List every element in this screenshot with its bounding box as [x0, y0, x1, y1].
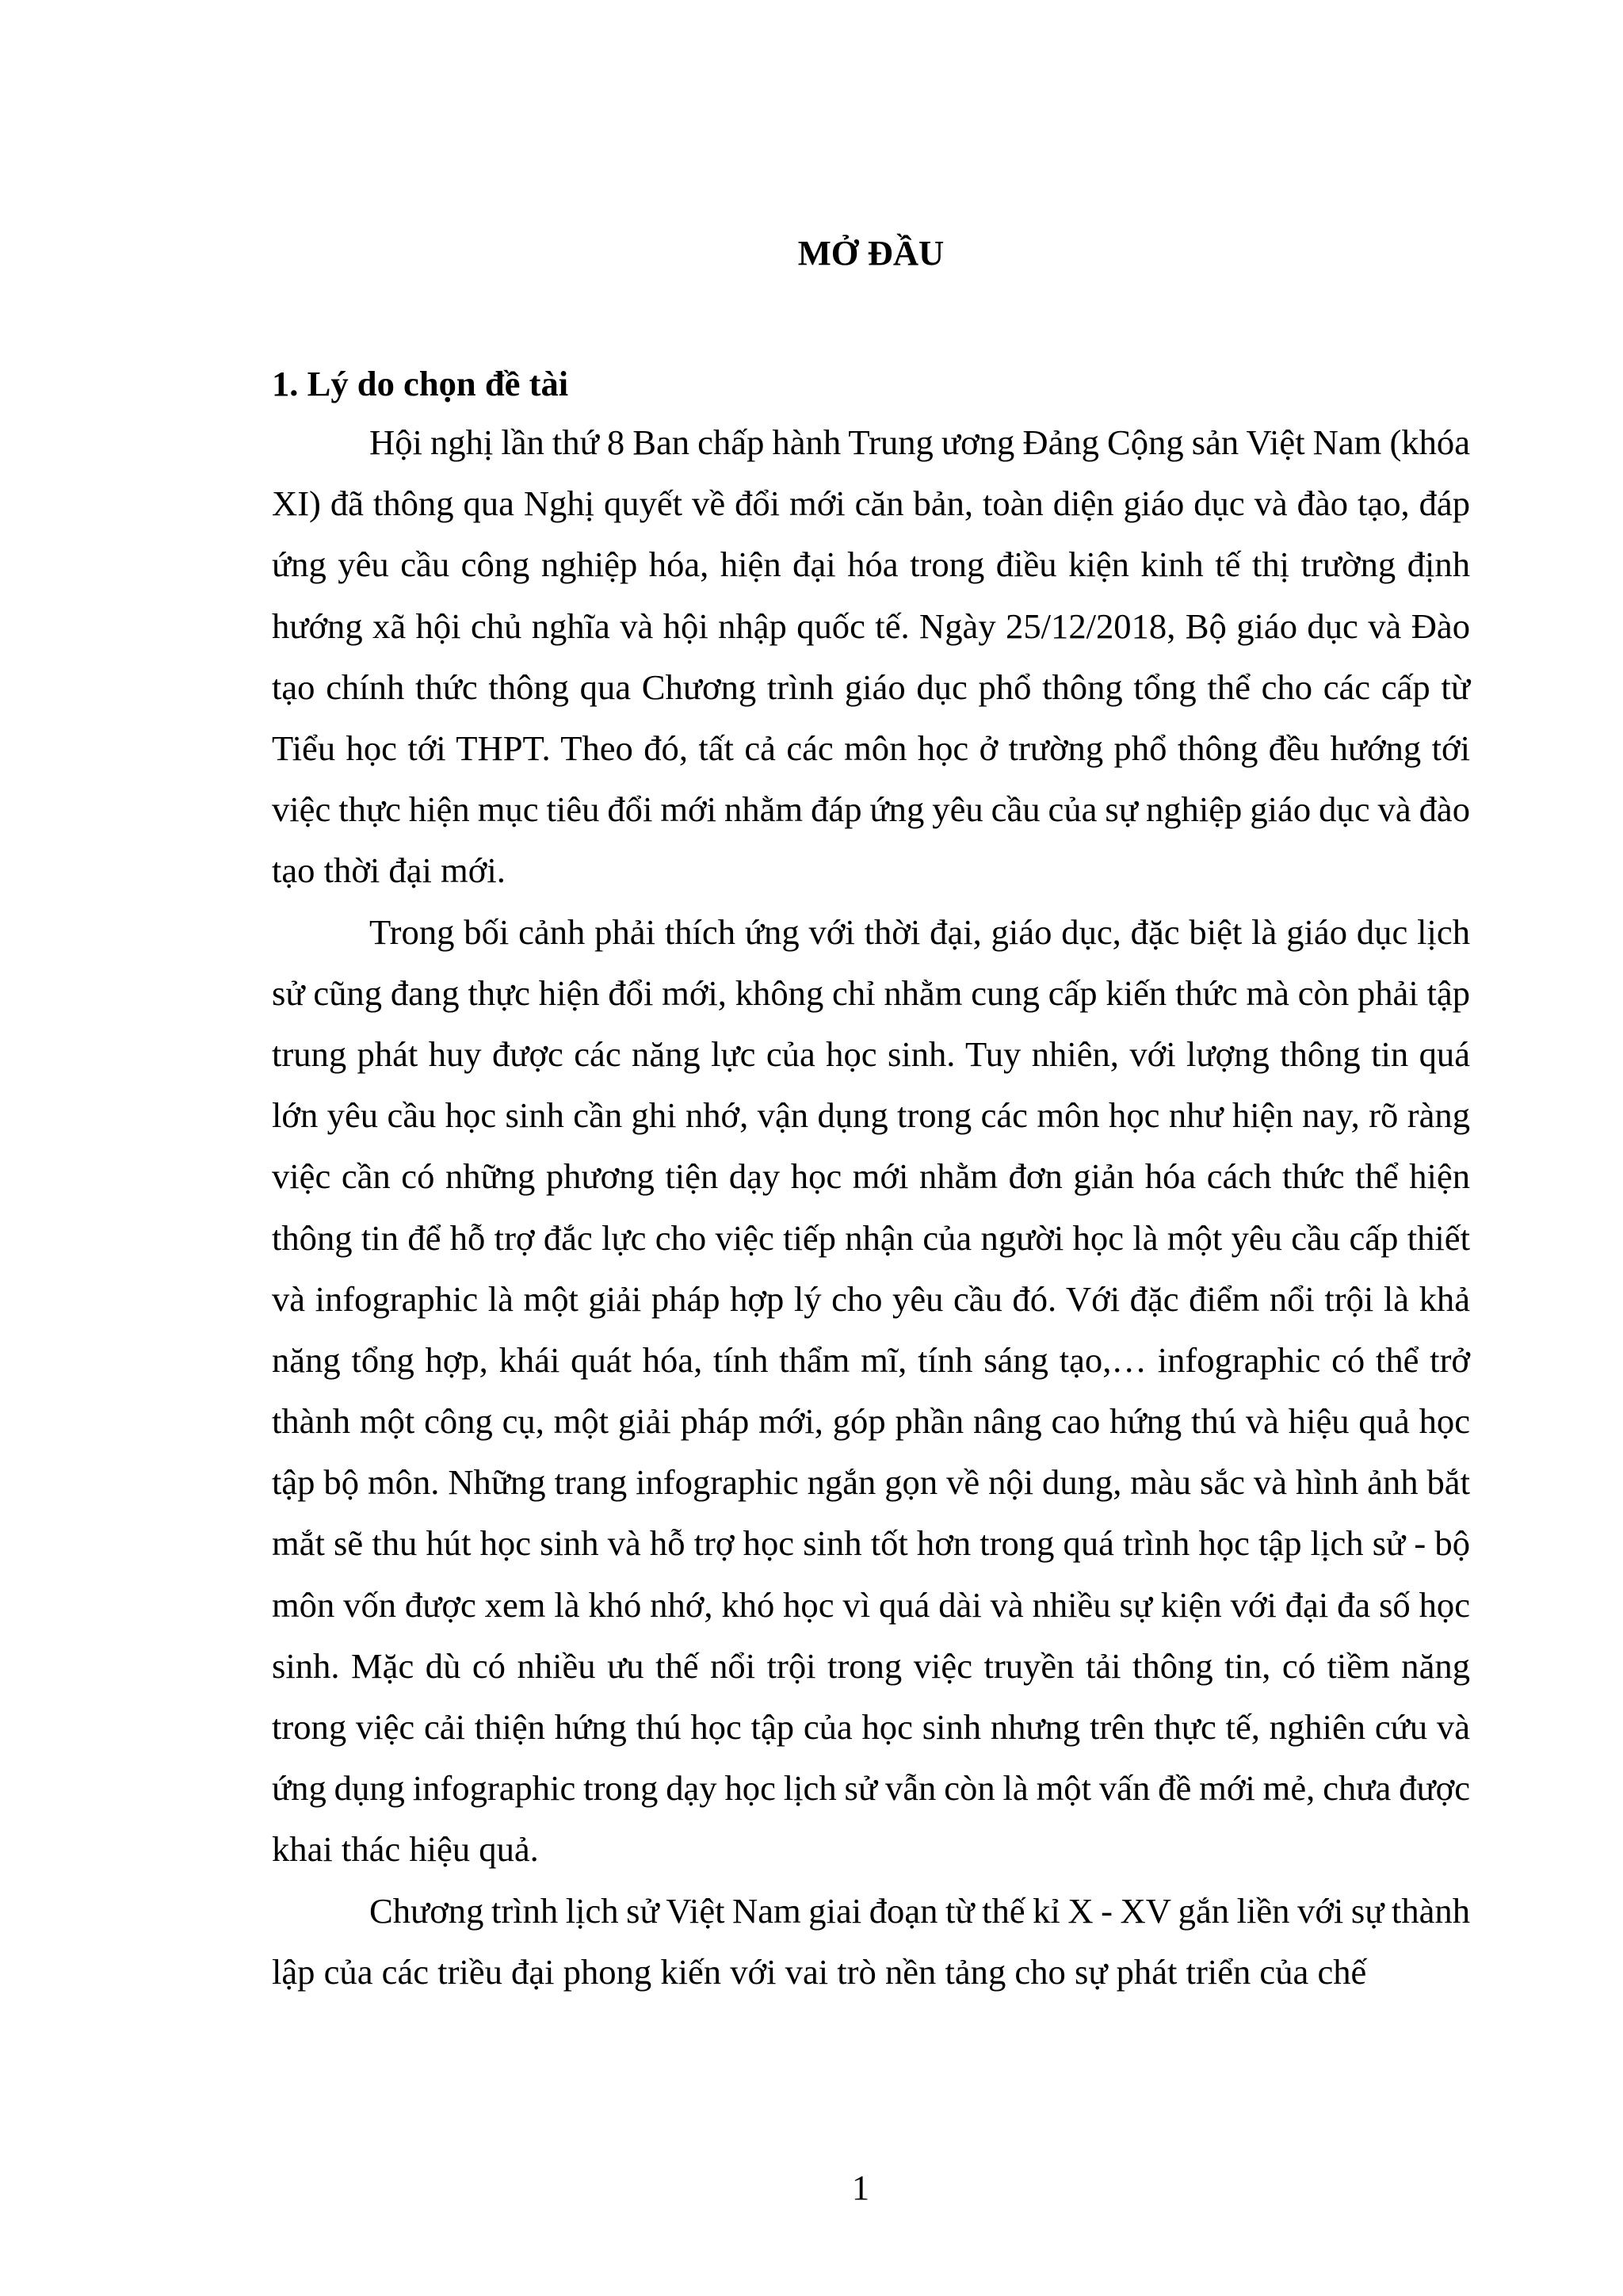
paragraph 2: môn vốn được xem là khó nhớ, khó học vì quá dài và nhiều sự kiện với đại đa số học: [272, 1585, 1470, 1625]
paragraph 2: ứng dụng infographic trong dạy học lịch sử vẫn còn là một vấn đề mới mẻ, chưa được: [272, 1768, 1470, 1808]
paragraph 2: khai thác hiệu quả.: [272, 1829, 539, 1869]
paragraph 2: năng tổng hợp, khái quát hóa, tính thẩm mĩ, tính sáng tạo,… infographic có thể trở: [272, 1340, 1470, 1380]
paragraph 3: Chương trình lịch sử Việt Nam giai đoạn từ thế kỉ X - XV gắn liền với sự thành: [369, 1891, 1470, 1931]
paragraph 1: [272, 422, 1471, 890]
paragraph 2: thành một công cụ, một giải pháp mới, góp phần nâng cao hứng thú và hiệu quả học: [272, 1401, 1470, 1441]
paragraph 1: ứng yêu cầu công nghiệp hóa, hiện đại hóa trong điều kiện kinh tế thị trường định: [272, 544, 1470, 584]
paragraph 2: tập bộ môn. Những trang infographic ngắn gọn về nội dung, màu sắc và hình ảnh bắt: [272, 1462, 1470, 1502]
page number: 1: [852, 2168, 869, 2207]
paragraph 1: việc thực hiện mục tiêu đổi mới nhằm đáp ứng yêu cầu của sự nghiệp giáo dục và đào: [272, 789, 1470, 829]
paragraph 1: tạo thời đại mới.: [272, 850, 506, 890]
paragraph 1: Tiểu học tới THPT. Theo đó, tất cả các môn học ở trường phổ thông đều hướng tới: [272, 728, 1470, 768]
paragraph 2: và infographic là một giải pháp hợp lý cho yêu cầu đó. Với đặc điểm nổi trội là khả: [272, 1279, 1470, 1319]
paragraph 2: lớn yêu cầu học sinh cần ghi nhớ, vận dụng trong các môn học như hiện nay, rõ ràng: [272, 1095, 1470, 1135]
title: MỞ ĐẦU: [798, 233, 944, 273]
paragraph 1: Hội nghị lần thứ 8 Ban chấp hành Trung ương Đảng Cộng sản Việt Nam (khóa: [369, 422, 1470, 462]
paragraph 2: sử cũng đang thực hiện đổi mới, không chỉ nhằm cung cấp kiến thức mà còn phải tập: [272, 973, 1470, 1013]
paragraph 3: [272, 1891, 1470, 1992]
paragraph 1: hướng xã hội chủ nghĩa và hội nhập quốc tế. Ngày 25/12/2018, Bộ giáo dục và Đào: [272, 606, 1470, 646]
paragraph 2: Trong bối cảnh phải thích ứng với thời đại, giáo dục, đặc biệt là giáo dục lịch: [369, 912, 1470, 952]
paragraph 2: trong việc cải thiện hứng thú học tập của học sinh nhưng trên thực tế, nghiên cứu và: [272, 1707, 1470, 1747]
paragraph 2: thông tin để hỗ trợ đắc lực cho việc tiếp nhận của người học là một yêu cầu cấp thiết: [272, 1218, 1470, 1258]
paragraph 1: XI) đã thông qua Nghị quyết về đổi mới căn bản, toàn diện giáo dục và đào tạo, đáp: [272, 483, 1470, 523]
paragraph 2: mắt sẽ thu hút học sinh và hỗ trợ học sinh tốt hơn trong quá trình học tập lịch sử - bộ: [272, 1523, 1470, 1563]
heading: section 1: 1. Lý do chọn đề tài: [272, 364, 568, 403]
paragraph 1: tạo chính thức thông qua Chương trình giáo dục phổ thông tổng thể cho các cấp từ: [272, 667, 1470, 707]
paragraph 2: [272, 912, 1471, 1869]
paragraph 2: trung phát huy được các năng lực của học sinh. Tuy nhiên, với lượng thông tin quá: [272, 1034, 1470, 1074]
paragraph 3: lập của các triều đại phong kiến với vai trò nền tảng cho sự phát triển của chế: [272, 1952, 1366, 1992]
paragraph 2: sinh. Mặc dù có nhiều ưu thế nổi trội trong việc truyền tải thông tin, có tiềm năng: [272, 1646, 1470, 1686]
paragraph 2: việc cần có những phương tiện dạy học mới nhằm đơn giản hóa cách thức thể hiện: [272, 1156, 1470, 1196]
